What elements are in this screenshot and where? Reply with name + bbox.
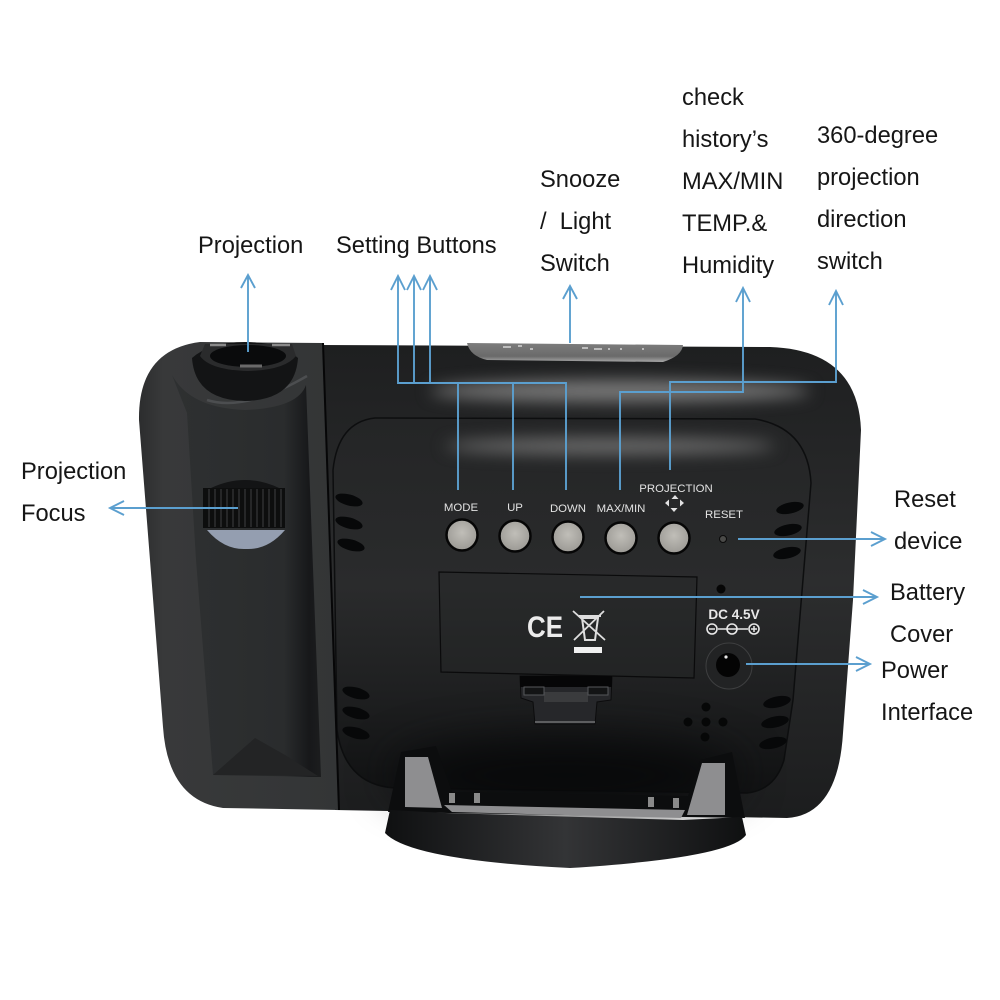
label: check history: history’s bbox=[682, 127, 768, 153]
top silver snooze bar bbox=[467, 343, 683, 362]
label: Battery Cover: Cover bbox=[890, 622, 953, 648]
label: Reset device: Reset bbox=[894, 487, 956, 513]
label: Battery Cover: Battery bbox=[890, 580, 965, 606]
label: Snooze / Light Switch bbox=[540, 167, 620, 277]
focus wheel bbox=[203, 480, 285, 549]
label: Power Interface: Power bbox=[881, 658, 948, 684]
label: check history bbox=[682, 85, 783, 279]
label: Battery Cover bbox=[890, 580, 965, 648]
main rear body bbox=[320, 345, 861, 818]
DC label bbox=[707, 607, 760, 634]
button labels: DOWN bbox=[550, 503, 586, 515]
setting buttons bbox=[446, 520, 690, 554]
arrows bbox=[110, 275, 885, 671]
label: Projection Focus: Focus bbox=[21, 501, 86, 527]
stand bbox=[385, 746, 746, 868]
power jack bbox=[706, 643, 752, 689]
label: Power Interface: Interface bbox=[881, 700, 973, 726]
reset pinhole bbox=[716, 536, 726, 594]
speaker holes bbox=[684, 702, 728, 742]
label: Reset device bbox=[894, 487, 962, 555]
CE mark and recycling symbol: CE bbox=[527, 611, 563, 644]
button labels bbox=[444, 483, 743, 521]
label: Reset device: device bbox=[894, 529, 962, 555]
label: Projection Focus bbox=[21, 459, 126, 527]
direction arrows icon bbox=[665, 495, 684, 512]
label: 360-degree projection direction switch bbox=[817, 123, 938, 275]
battery cover bbox=[439, 572, 697, 678]
label: check history: check bbox=[682, 85, 744, 111]
label: Projection Focus: Projection bbox=[21, 459, 126, 485]
label: 360-degree projection direction switch: direction bbox=[817, 207, 907, 233]
vent slots bbox=[334, 491, 805, 751]
projection lens bbox=[192, 342, 307, 403]
label: Projection: Projection bbox=[198, 233, 303, 259]
label: 360-degree projection direction switch: switch bbox=[817, 249, 883, 275]
button labels: PROJECTION bbox=[639, 483, 713, 495]
DC label: DC 4.5V bbox=[708, 607, 760, 622]
label: check history: MAX/MIN bbox=[682, 169, 783, 195]
button labels: UP bbox=[507, 502, 523, 514]
label: Snooze / Light Switch: Snooze bbox=[540, 167, 620, 193]
button labels: MAX/MIN bbox=[597, 503, 645, 515]
label: check history: Humidity bbox=[682, 253, 774, 279]
button labels: MODE bbox=[444, 502, 478, 514]
label: Snooze / Light Switch: / Light bbox=[540, 209, 611, 235]
label: 360-degree projection direction switch: 360-degree bbox=[817, 123, 938, 149]
label: Power Interface bbox=[881, 658, 973, 726]
button labels: RESET bbox=[705, 509, 743, 521]
projector arm bbox=[139, 342, 339, 810]
label: 360-degree projection direction switch: projection bbox=[817, 165, 920, 191]
label: Setting Buttons: Setting Buttons bbox=[336, 233, 497, 259]
label: Snooze / Light Switch: Switch bbox=[540, 251, 610, 277]
label: check history: TEMP.& bbox=[682, 211, 767, 237]
CE mark and recycling symbol bbox=[527, 611, 605, 653]
stand hinge bbox=[520, 676, 612, 724]
recessed rear panel bbox=[333, 418, 811, 810]
